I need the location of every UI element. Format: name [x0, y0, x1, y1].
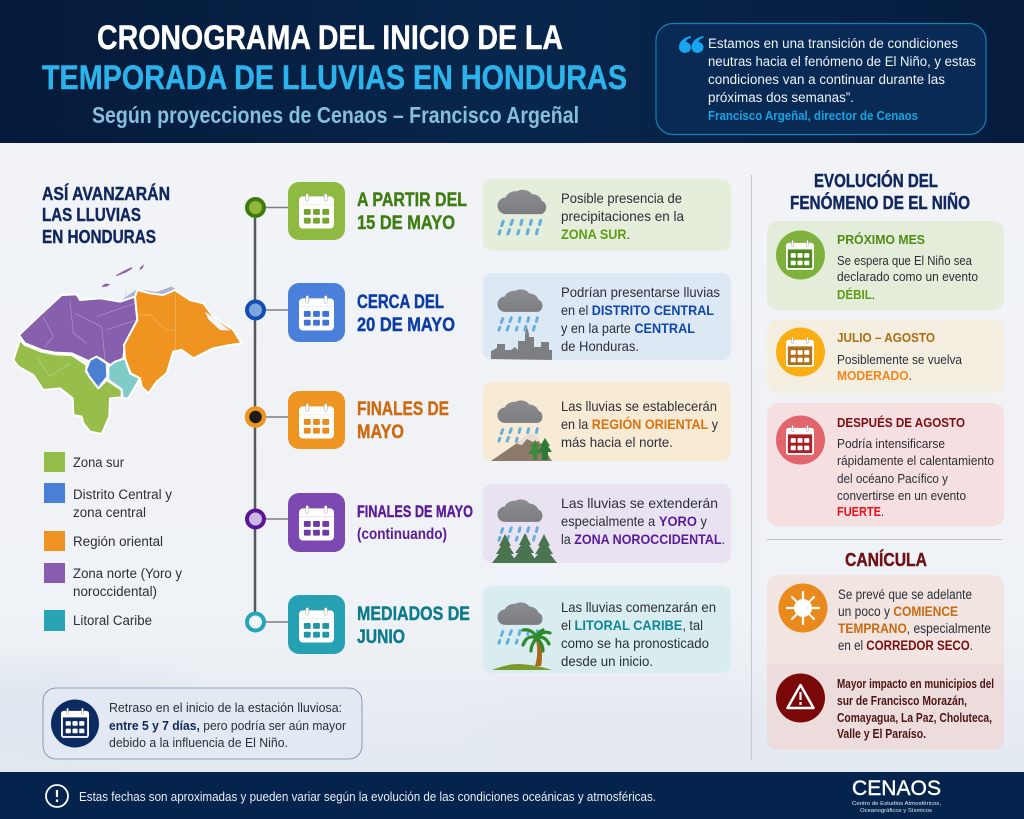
- quote box: próximas dos semanas”.: [708, 90, 854, 105]
- title: CRONOGRAMA DEL INICIO DE LA: [97, 19, 563, 57]
- step 4: finales de mayo continuando: FINALES DE MAYO: [357, 502, 473, 521]
- title: Según proyecciones de Cenaos – Francisco Argeñal: [92, 102, 579, 128]
- step 4: finales de mayo continuando: [288, 484, 731, 563]
- card: distrito central: [483, 273, 731, 360]
- footer band: Estas fechas son aproximadas y pueden variar según la evolución de las condiciones oceánicas y atmosféricas.: [79, 790, 656, 804]
- heading: evolución del fenómeno de el niño: [790, 170, 970, 213]
- card: litoral caribe: Las lluvias comenzarán en: [561, 599, 716, 615]
- icon: calendar teal: [288, 595, 345, 654]
- icon: calendar in amber circle: [776, 328, 825, 376]
- icon: calendar in green circle: [776, 230, 825, 280]
- logo: CENAOS: CENAOS: [852, 777, 941, 800]
- icon: pine trees: [492, 533, 557, 563]
- step 1: a partir del 15 de mayo: A PARTIR DEL: [357, 190, 467, 211]
- panel: canícula: Comayagua, La Paz, Choluteca,: [837, 711, 992, 725]
- card: region oriental: más hacia el norte.: [561, 434, 673, 450]
- region: zona norte: [19, 294, 137, 365]
- card: zona sur: ZONA SUR.: [561, 226, 630, 242]
- card: litoral caribe: como se ha pronosticado: [561, 635, 709, 651]
- step 3: finales de mayo: [288, 382, 731, 461]
- step 1: a partir del 15 de mayo: 15 DE MAYO: [357, 213, 455, 234]
- icon: sun: [778, 584, 828, 632]
- legend item: distrito central: [44, 483, 172, 520]
- panel: después de agosto: rápidamente el calentamiento: [837, 454, 994, 468]
- card: distrito central: Podrían presentarse lluvias: [561, 284, 720, 300]
- heading: canícula: CANÍCULA: [845, 549, 927, 570]
- panel: canícula: Se prevé que se adelante: [838, 587, 972, 602]
- page background: [0, 143, 1024, 773]
- header band: [0, 0, 1024, 143]
- step 5: mediados de junio: [288, 586, 731, 673]
- heading: evolución del fenómeno de el niño: FENÓMENO DE EL NIÑO: [790, 192, 970, 213]
- icon: calendar green: [288, 182, 345, 240]
- quote box: [656, 24, 986, 134]
- icon: exclamation circle: [46, 785, 68, 807]
- card: litoral caribe: [483, 586, 731, 673]
- panel: próximo mes: Se espera que El Niño sea: [837, 254, 972, 268]
- callout: retraso: [43, 688, 362, 759]
- quote box: Estamos en una transición de condiciones: [708, 36, 958, 51]
- panel: próximo mes: [767, 221, 1004, 310]
- card: zona noroccidental: [483, 484, 731, 563]
- step 5: mediados de junio: JUNIO: [357, 627, 405, 648]
- panel: después de agosto: DESPUÉS DE AGOSTO: [837, 415, 965, 430]
- title: [42, 19, 627, 128]
- map of Honduras: [13, 264, 242, 434]
- heading: evolución del fenómeno de el niño: EVOLUCIÓN DEL: [814, 170, 938, 191]
- legend item: region oriental: Región oriental: [73, 534, 163, 549]
- card: region oriental: en la REGIÓN ORIENTAL y: [561, 415, 718, 432]
- region: distrito central: [86, 357, 107, 388]
- legend item: zona norte: Zona norte (Yoro y: [73, 566, 182, 581]
- icon: calendar in red circle: [776, 416, 825, 464]
- legend item: zona sur: [44, 452, 124, 472]
- panel: canícula: un poco y COMIENCE: [838, 604, 958, 619]
- region: zona sur: [13, 340, 122, 434]
- panel: canícula: [767, 575, 1004, 750]
- footer band: [0, 772, 1024, 819]
- callout: retraso: debido a la influencia de El Niño.: [109, 735, 288, 750]
- card: zona noroccidental: Las lluvias se extenderán: [561, 495, 718, 511]
- card: region oriental: [483, 382, 731, 461]
- panel: map column heading: [42, 183, 170, 247]
- quote box: neutras hacia el fenómeno de El Niño, y estas: [708, 54, 976, 69]
- card: zona sur: Posible presencia de: [561, 190, 682, 206]
- timeline node 4: [247, 510, 264, 528]
- logo: CENAOS: [852, 777, 941, 814]
- card: zona sur: [483, 179, 731, 251]
- panel: después de agosto: [767, 403, 1004, 526]
- legend item: litoral caribe: [44, 610, 152, 631]
- icon: warning triangle: [776, 674, 825, 722]
- panel: map column heading: LAS LLUVIAS: [42, 205, 141, 225]
- step 5: mediados de junio: MEDIADOS DE: [357, 604, 470, 625]
- timeline node 1: [247, 199, 264, 216]
- panel: canícula: TEMPRANO, especialmente: [838, 621, 991, 636]
- panel: julio agosto: Posiblemente se vuelva: [837, 353, 962, 367]
- panel: julio agosto: [767, 319, 1004, 393]
- timeline node 2: [247, 302, 264, 318]
- panel: map column heading: ASÍ AVANZARÁN: [42, 183, 170, 204]
- callout: retraso: Retraso en el inicio de la estación lluviosa:: [109, 700, 342, 715]
- card: litoral caribe: el LITORAL CARIBE, tal: [561, 617, 703, 633]
- panel: julio agosto: MODERADO.: [837, 369, 912, 383]
- legend item: distrito central: Distrito Central y: [73, 487, 172, 502]
- card: zona sur: precipitaciones en la: [561, 208, 684, 224]
- step 2: cerca del 20 de mayo: CERCA DEL: [357, 292, 444, 313]
- legend item: distrito central: zona central: [73, 505, 146, 520]
- step 4: finales de mayo continuando: (continuando): [357, 526, 447, 543]
- panel: canícula: sur de Francisco Morazán,: [837, 694, 967, 708]
- icon: calendar orange: [288, 391, 345, 449]
- icon: mountain with trees: [491, 434, 552, 461]
- quote box: Francisco Argeñal, director de Cenaos: [708, 109, 918, 123]
- panel: después de agosto: Podría intensificarse: [837, 437, 945, 451]
- logo: CENAOS: Oceanográficos y Sísmicos: [860, 808, 932, 814]
- card: litoral caribe: desde un inicio.: [561, 653, 653, 669]
- panel: canícula: Valle y El Paraíso.: [837, 727, 926, 741]
- panel: map column heading: EN HONDURAS: [42, 227, 156, 247]
- panel: después de agosto: del océano Pacífico y: [837, 472, 949, 486]
- step 3: finales de mayo: MAYO: [357, 422, 404, 443]
- callout: retraso: entre 5 y 7 días, pero podría ser aún mayor: [109, 718, 347, 733]
- region: oriental: [124, 290, 242, 393]
- icon: palm tree: [492, 630, 552, 670]
- icon: calendar blue: [288, 283, 345, 342]
- step 2: cerca del 20 de mayo: [288, 273, 731, 360]
- step 1: a partir del 15 de mayo: [288, 179, 731, 251]
- panel: próximo mes: declarado como un evento: [837, 270, 978, 284]
- legend item: zona norte: noroccidental): [73, 584, 157, 599]
- panel: próximo mes: DÉBIL.: [837, 287, 875, 302]
- legend item: zona norte: [44, 563, 182, 599]
- region: litoral caribe: [108, 358, 140, 398]
- card: zona noroccidental: especialmente a YORO y: [561, 513, 707, 529]
- card: distrito central: y en la parte CENTRAL: [561, 320, 695, 336]
- timeline node 5: [247, 614, 264, 630]
- icon: city skyline: [491, 327, 552, 360]
- legend item: region oriental: [44, 531, 163, 551]
- quote box: condiciones van a continuar durante las: [708, 72, 945, 87]
- card: distrito central: en el DISTRITO CENTRAL: [561, 302, 714, 318]
- legend item: zona sur: Zona sur: [73, 455, 124, 470]
- icon: quotation marks: [679, 36, 704, 53]
- timeline node 3: [247, 408, 264, 426]
- panel: después de agosto: convertirse en un evento: [837, 489, 966, 503]
- step 3: finales de mayo: FINALES DE: [357, 399, 449, 420]
- title: TEMPORADA DE LLUVIAS EN HONDURAS: [42, 59, 627, 97]
- panel: después de agosto: FUERTE.: [837, 505, 884, 519]
- icon: calendar purple: [288, 493, 345, 552]
- card: region oriental: Las lluvias se establecerán: [561, 398, 717, 414]
- icon: calendar in navy circle: [51, 700, 99, 748]
- legend: [44, 452, 182, 631]
- logo: CENAOS: Centro de Estudios Atmosféricos,: [852, 801, 941, 807]
- timeline: [247, 199, 290, 630]
- legend item: litoral caribe: Litoral Caribe: [73, 613, 152, 628]
- panel: canícula: en el CORREDOR SECO.: [838, 638, 973, 653]
- card: zona noroccidental: la ZONA NOROCCIDENTAL.: [561, 531, 725, 547]
- panel: próximo mes: PRÓXIMO MES: [837, 232, 925, 247]
- card: distrito central: de Honduras.: [561, 338, 639, 354]
- panel: julio agosto: JULIO – AGOSTO: [837, 331, 935, 345]
- step 2: cerca del 20 de mayo: 20 DE MAYO: [357, 315, 455, 336]
